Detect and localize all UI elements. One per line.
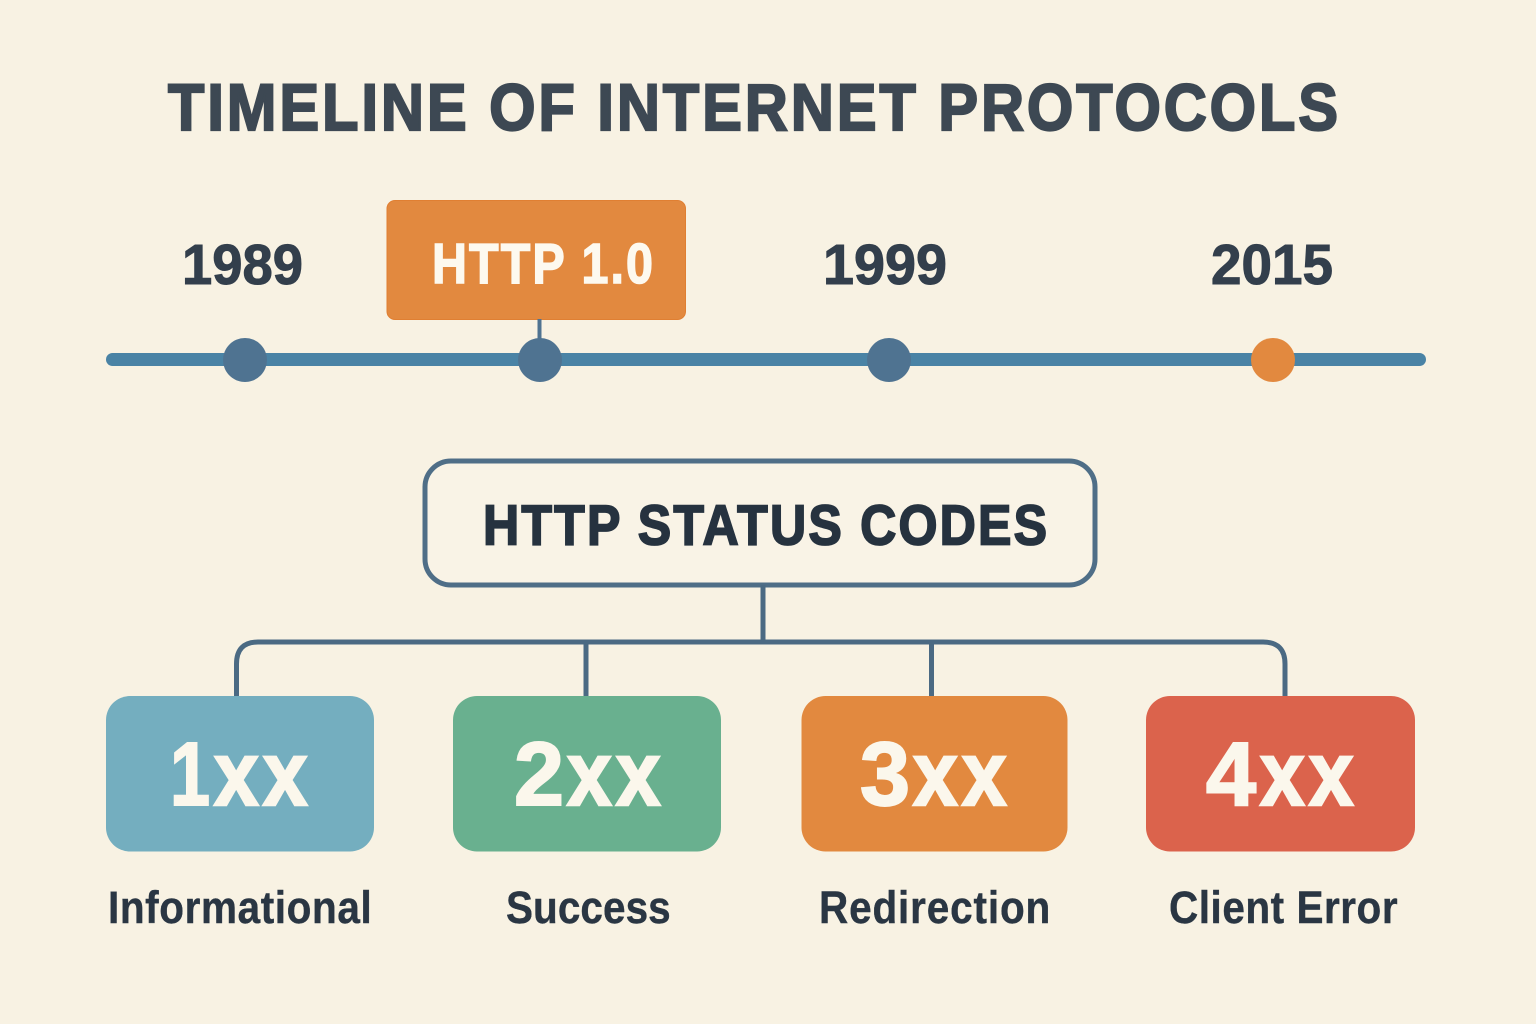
status card: 3xx: 3 [860,725,910,825]
timeline axis [106,353,1426,366]
label: Success: Success [506,883,671,934]
status card: 4xx: 4 [1206,725,1256,825]
milestone marker: 1989 [223,338,267,382]
label: Redirection: Redirection [819,883,1050,934]
status card: 2xx: xx [567,723,665,825]
label: Client Error: Client Error [1169,883,1398,934]
callout connector [538,319,542,341]
year label: 1999: 1999 [823,233,947,297]
status card: 3xx [802,696,1068,852]
heading box: HTTP status codes [425,461,1095,585]
tree connectors [236,585,1285,696]
heading box: HTTP status codes: HTTP STATUS CODES [483,494,1047,557]
callout: HTTP 1.0: HTTP 1.0 [432,232,653,296]
milestone marker: 1999 [867,338,911,382]
status card: 2xx [453,696,721,852]
status card: 1xx: xx [214,723,312,825]
title: TIMELINE OF INTERNET PROTOCOLS [168,71,1338,145]
label: Informational: Informational [108,883,372,934]
timeline [106,200,1426,382]
status card: 4xx [1146,696,1415,852]
milestone marker: 2015 [1251,338,1295,382]
status card: 1xx [106,696,374,852]
year label: 1989: 1989 [182,233,303,297]
callout: HTTP 1.0 [387,200,686,320]
status card: 2xx: 2 [514,725,564,825]
status card: 3xx: xx [913,723,1011,825]
status card: 4xx: xx [1260,723,1358,825]
milestone marker: HTTP 1.0 [518,338,562,382]
year label: 2015: 2015 [1211,233,1333,297]
status card: 1xx: 1 [170,724,210,825]
